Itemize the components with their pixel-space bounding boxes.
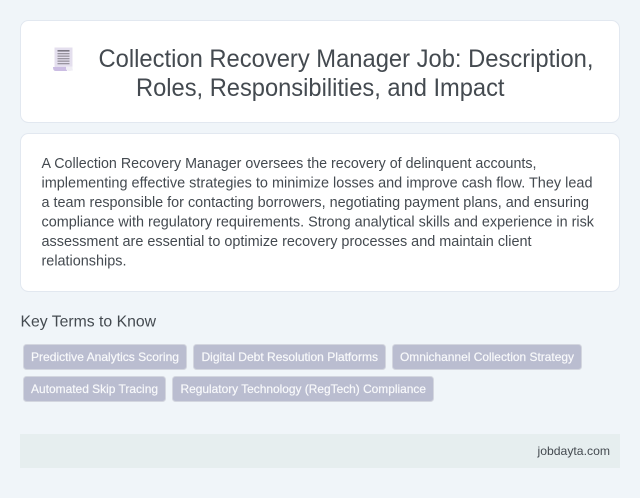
tag: predictive analytics scoring (24, 344, 186, 370)
tag list: key terms (24, 344, 582, 402)
title: Collection Recovery Manager Job: Description, (98, 45, 594, 73)
text block: job description: assessment are essential to optimize recovery processes and maintain client (42, 234, 532, 250)
text block: job description: implementing effective strategies to minimize losses and improve cash flow. They lead (42, 176, 593, 192)
text block: job description: A Collection Recovery Manager oversees the recovery of delinquent accounts, (42, 156, 536, 172)
title (98, 45, 594, 102)
tag: digital debt resolution platforms: Digital Debt Resolution Platforms (202, 350, 378, 364)
text block: job description: a team responsible for contacting borrowers, negotiating payment plans, and ensuring (42, 195, 589, 211)
tag: omnichannel collection strategy (392, 344, 582, 370)
tag: automated skip tracing (24, 376, 166, 402)
text block: job description (42, 156, 595, 270)
tag: digital debt resolution platforms (194, 344, 386, 370)
tag: automated skip tracing: Automated Skip Tracing (31, 382, 158, 396)
footer bar (20, 434, 620, 468)
tag: regulatory technology compliance (172, 376, 434, 402)
text block: job description: relationships. (42, 254, 126, 270)
heading: key terms: Key Terms to Know (20, 314, 156, 330)
tag: regulatory technology compliance: Regulatory Technology (RegTech) Compliance (180, 382, 426, 396)
title: Roles, Responsibilities, and Impact (136, 74, 505, 102)
tag: predictive analytics scoring: Predictive Analytics Scoring (31, 350, 179, 364)
icon: document scroll (53, 48, 72, 71)
panel: description card (20, 134, 620, 292)
text block: job description: compliance with regulatory requirements. Strong analytical skills and experience in risk (42, 214, 595, 230)
panel: title card (20, 20, 620, 122)
tag: omnichannel collection strategy: Omnichannel Collection Strategy (400, 350, 574, 364)
footer credit: jobdayta.com (536, 444, 610, 458)
